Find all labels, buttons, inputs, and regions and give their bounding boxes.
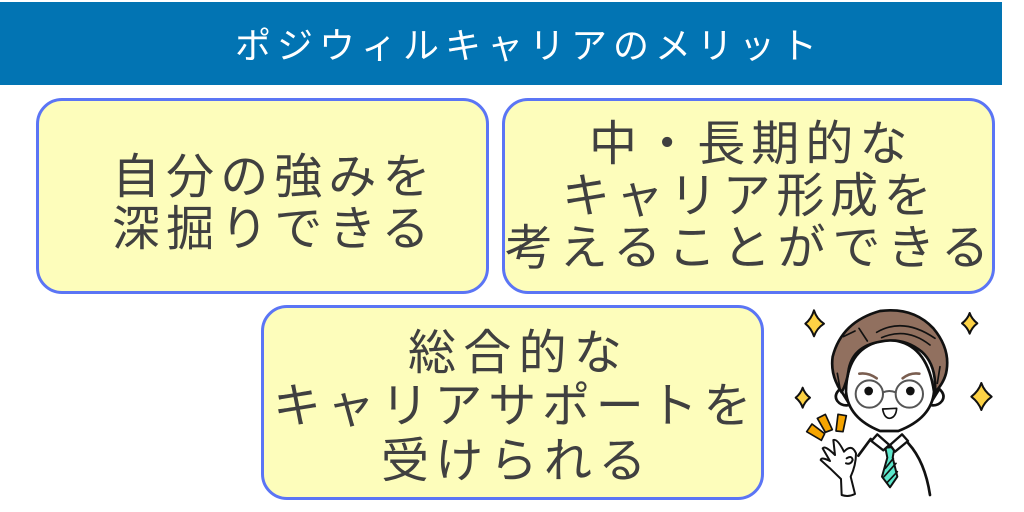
- text: long-term career line 3: 考えることができる: [505, 222, 996, 275]
- man: eyes: [864, 387, 915, 395]
- text: self-knowledge line 2: 深掘りできる: [112, 203, 436, 256]
- man: glasses: [856, 380, 923, 408]
- header banner: [0, 2, 1002, 85]
- man: face: [846, 340, 934, 431]
- man: hair: [832, 310, 947, 392]
- man: eyebrows: [859, 373, 919, 378]
- man: ears: [836, 389, 944, 405]
- text: comprehensive support line 2: キャリアサポートを: [273, 380, 757, 433]
- text: comprehensive support line 1: 総合的な: [408, 327, 629, 380]
- icon: orange emphasis marks: [807, 414, 846, 440]
- text: self-knowledge line 1: 自分の強みを: [112, 151, 437, 204]
- man: collar: [871, 434, 908, 452]
- man: necktie: [882, 447, 897, 487]
- panel: comprehensive support: [261, 305, 764, 500]
- man: hair strands: [837, 326, 940, 388]
- man: shirt body: [858, 439, 930, 495]
- text: comprehensive support line 3: 受けられる: [381, 435, 653, 488]
- title: ポジウィルキャリアのメリット: [235, 25, 823, 66]
- panel: long-term career: [502, 98, 995, 294]
- man: OK hand: [821, 440, 856, 496]
- man: mouth: [883, 408, 897, 418]
- text: long-term career line 1: 中・長期的な: [589, 118, 914, 171]
- text: long-term career line 2: キャリア形成を: [562, 170, 937, 223]
- panel: self-knowledge: [36, 98, 489, 294]
- illustration: man with glasses making OK sign: [794, 309, 993, 497]
- icon: sparkles: [796, 310, 992, 410]
